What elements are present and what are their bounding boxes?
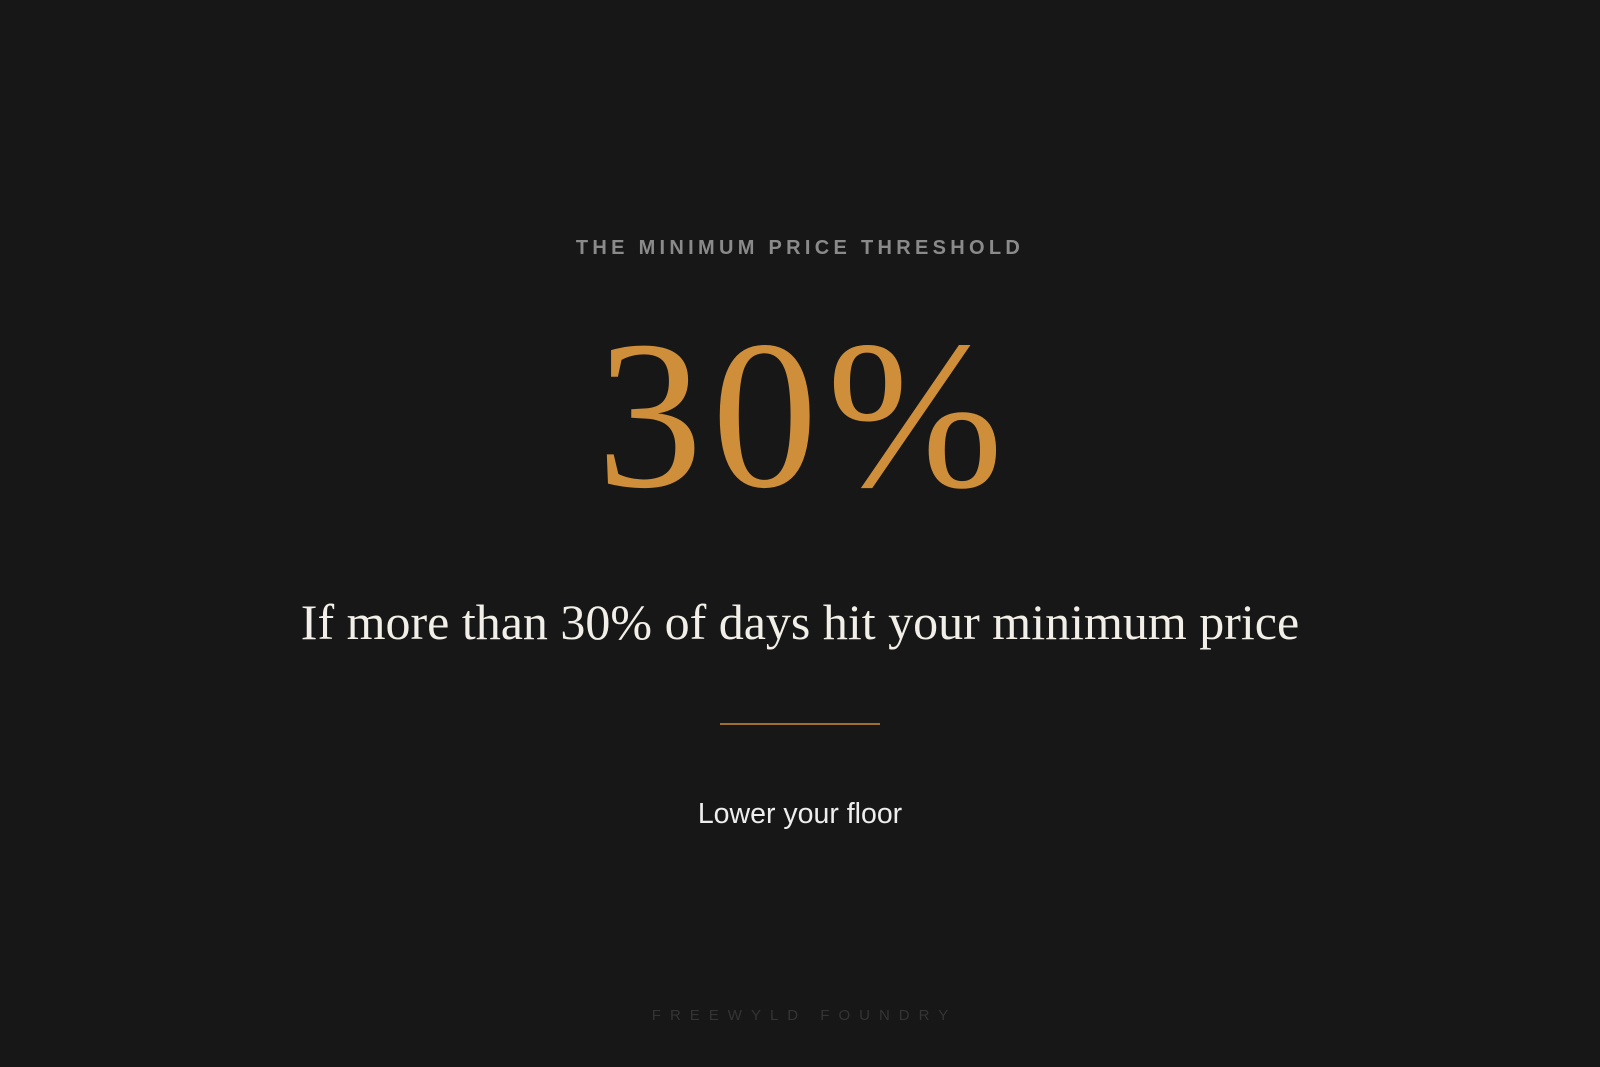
big stat: 30%: 30% (597, 297, 1012, 532)
footer brand: FREEWYLD FOUNDRY (652, 1007, 957, 1024)
statement text: If more than 30% of days hit your minimum price (301, 594, 1299, 650)
divider accent line (720, 723, 880, 725)
action text: Lower your floor (698, 798, 902, 830)
heading: eyebrow label: THE MINIMUM PRICE THRESHOLD (576, 237, 1024, 259)
